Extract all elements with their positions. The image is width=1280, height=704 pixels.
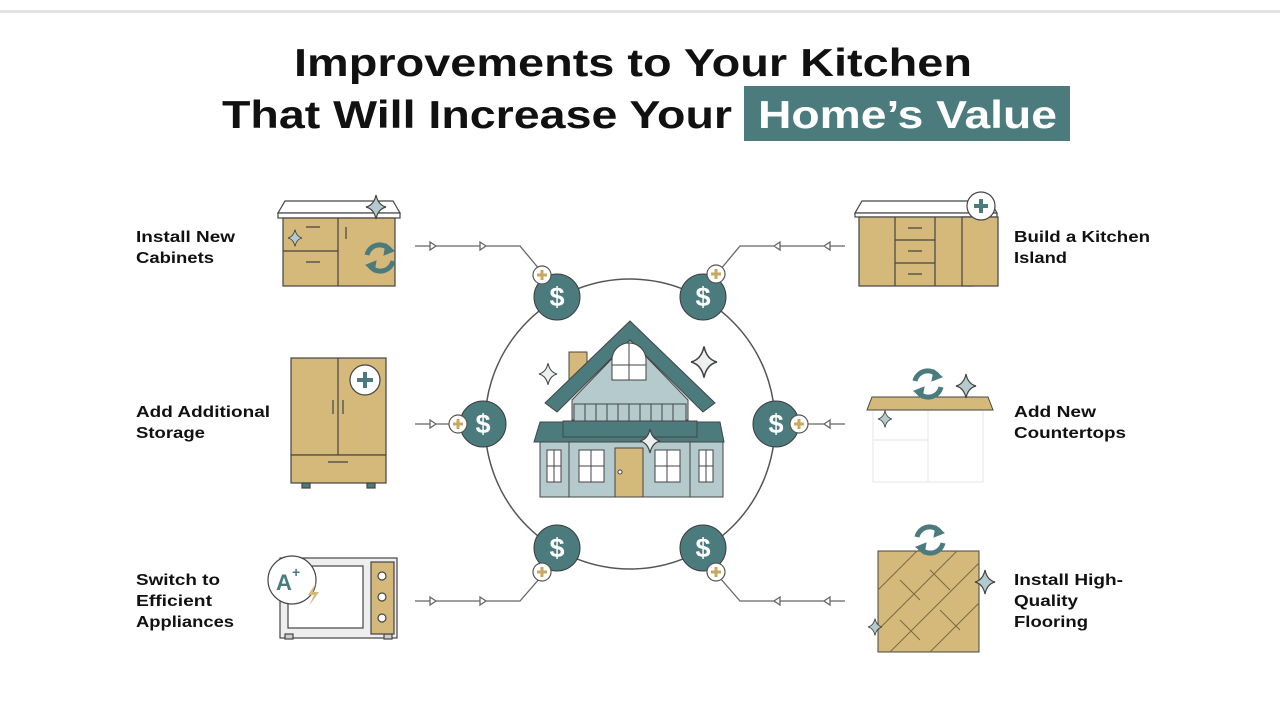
panel: storage: Add Additional	[136, 404, 270, 421]
panel: storage: Storage	[136, 425, 205, 442]
panel: cabinets: Install New	[136, 229, 236, 246]
panel: cabinets	[136, 195, 400, 286]
panel: appliances	[136, 556, 397, 639]
panel: flooring: Quality	[1014, 593, 1078, 610]
panel: countertops	[867, 370, 1126, 482]
title: Improvements to Your Kitchen	[294, 42, 972, 85]
title: Home’s Value	[758, 94, 1057, 137]
coins	[449, 265, 808, 581]
panel: island: Island	[1014, 250, 1067, 267]
panel: countertops: Countertops	[1014, 425, 1126, 442]
panel: countertops: Add New	[1014, 404, 1097, 421]
panel: storage	[136, 358, 386, 488]
panel: island: Build a Kitchen	[1014, 229, 1150, 246]
panel: flooring: Install High-	[1014, 572, 1123, 589]
panel: appliances: Appliances	[136, 614, 234, 631]
icon: house	[534, 321, 724, 497]
connector lines	[415, 242, 845, 605]
title	[222, 42, 1070, 141]
title: That Will Increase Your	[222, 94, 732, 137]
panel: appliances: Efficient	[136, 593, 213, 610]
panel: cabinets: Cabinets	[136, 250, 214, 267]
panel: appliances: A	[276, 570, 292, 595]
circle ring	[485, 279, 775, 569]
panel: appliances: +	[292, 564, 300, 580]
panel: island	[855, 192, 1150, 286]
panel: appliances: Switch to	[136, 572, 220, 589]
sparkles house	[539, 346, 717, 453]
panel: flooring	[868, 526, 1123, 652]
panel: flooring: Flooring	[1014, 614, 1088, 631]
